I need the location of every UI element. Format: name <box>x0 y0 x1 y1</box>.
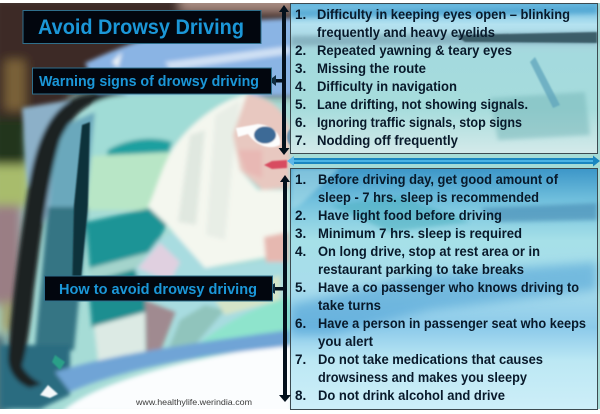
list items: warning signs: Repeated yawning & teary eyes <box>317 43 512 58</box>
list items: prevention tips: 3. <box>295 226 306 241</box>
arrow: prevention bracket <box>267 175 291 402</box>
scarf <box>148 94 288 268</box>
list items: prevention tips: Do not take medications that causes <box>318 352 543 367</box>
list items: prevention tips: 6. <box>295 316 306 331</box>
list items: prevention tips: On long drive, stop at rest area or in <box>318 244 540 259</box>
list items: warning signs: Ignoring traffic signals, stop signs <box>317 115 522 130</box>
list items: prevention tips: sleep - 7 hrs. sleep is recommended <box>318 190 539 205</box>
leg <box>145 300 176 352</box>
list items: warning signs: Difficulty in keeping eyes open – blinking <box>317 7 570 22</box>
green bonnet and door bottom <box>203 296 290 342</box>
list items: warning signs: 7. <box>295 133 306 148</box>
panel: warning signs list <box>290 4 598 154</box>
heading: warning signs of drowsy driving: Warning signs of drowsy driving <box>39 73 259 90</box>
heading: how to avoid drowsy driving: How to avoid drowsy driving <box>59 281 257 298</box>
list items: prevention tips: Before driving day, get good amount of <box>318 172 558 187</box>
dress <box>132 232 283 333</box>
arrow: warning signs bracket <box>269 5 290 155</box>
title <box>23 10 261 44</box>
list items: prevention tips: 7. <box>295 352 306 367</box>
list items: prevention tips: Do not drink alcohol and drive <box>318 388 505 403</box>
lips <box>264 160 287 169</box>
list items: prevention tips: 1. <box>295 172 306 187</box>
list items: prevention tips: Have a person in passenger seat who keeps <box>318 316 586 331</box>
list items: warning signs: 6. <box>295 115 306 130</box>
list items: warning signs: 4. <box>295 79 306 94</box>
title: Avoid Drowsy Driving <box>38 16 244 39</box>
list items: prevention tips: Have a co passenger who knows driving to <box>318 280 579 295</box>
face <box>233 94 290 190</box>
arrow: horizontal blue divider <box>287 156 600 166</box>
list items: warning signs <box>295 7 570 148</box>
heading: how to avoid drowsy driving <box>44 276 272 301</box>
list items: warning signs: Difficulty in navigation <box>317 79 457 94</box>
list items: prevention tips: 5. <box>295 280 306 295</box>
list items: prevention tips: 8. <box>295 388 306 403</box>
list items: prevention tips: drowsiness and makes you sleepy <box>318 370 527 385</box>
list items: prevention tips: you alert <box>318 334 373 349</box>
list items: prevention tips: 4. <box>295 244 306 259</box>
list items: warning signs: 1. <box>295 7 306 22</box>
sunglasses <box>236 124 280 147</box>
list items: prevention tips: Minimum 7 hrs. sleep is required <box>318 226 522 241</box>
interior <box>90 94 249 152</box>
list items: warning signs: Lane drifting, not showing signals. <box>317 97 528 112</box>
bottom-left corner of door <box>0 345 70 409</box>
list items: warning signs: 5. <box>295 97 306 112</box>
list items: prevention tips: restaurant parking to take breaks <box>318 262 524 277</box>
list items: prevention tips <box>295 172 586 403</box>
heading: warning signs of drowsy driving <box>32 68 272 94</box>
list items: prevention tips: take turns <box>318 298 381 313</box>
seat <box>86 208 168 272</box>
website credit: www.healthylife.werindia.com <box>135 397 252 407</box>
chrome window frame <box>22 100 70 240</box>
list items: warning signs: 3. <box>295 61 306 76</box>
list items: prevention tips: Have light food before driving <box>318 208 502 223</box>
pillar <box>8 93 128 388</box>
list items: warning signs: Nodding off frequently <box>317 133 458 148</box>
car roof <box>85 18 300 96</box>
panel: how to avoid list <box>290 168 598 410</box>
list items: prevention tips: 2. <box>295 208 306 223</box>
list items: warning signs: 2. <box>295 43 306 58</box>
list items: warning signs: frequently and heavy eyelids <box>317 25 495 40</box>
list items: warning signs: Missing the route <box>317 61 426 76</box>
